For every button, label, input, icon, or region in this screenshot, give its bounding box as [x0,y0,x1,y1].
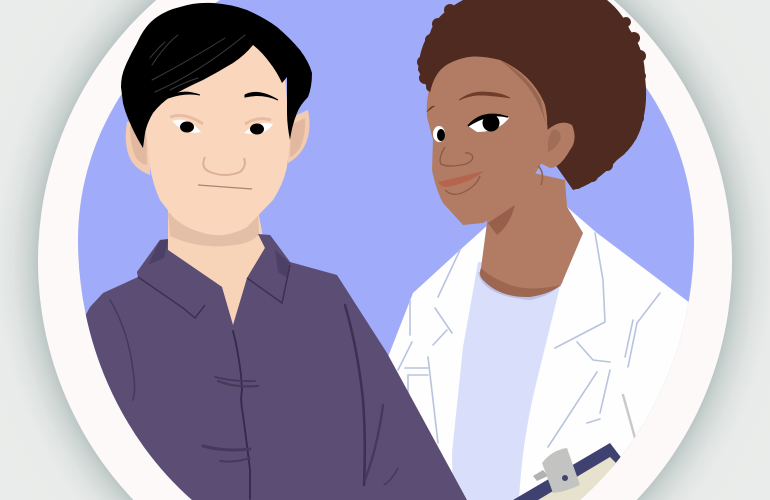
shirt folds [110,300,398,499]
clipboard [513,443,623,500]
patient neck [168,205,265,325]
doctor mouth [438,171,484,187]
patient mouth [198,185,252,189]
patient brows [168,92,278,100]
doctor face [427,56,548,225]
doctor left eye [433,126,445,142]
patient shirt [84,235,467,500]
doctor brows [427,92,510,112]
hair highlights [150,35,245,92]
patient left ear [126,120,150,175]
doctor right eye [468,114,509,132]
clip [542,448,580,493]
t-shirt hem shade [478,270,563,300]
patient right ear [288,110,310,163]
doctor hairline [429,56,548,125]
patient hair [121,3,312,148]
people group [84,0,690,500]
doctor nose [440,147,473,166]
doctor hair [417,0,646,190]
neck shadow [480,268,561,297]
doctor ear [538,123,575,168]
lab coat [360,207,690,500]
doctor neck [481,170,583,296]
chin shadow [488,205,515,235]
patient right eye [244,119,273,134]
patient nose [203,157,245,175]
neck shadow [168,210,259,246]
patient face [145,40,290,235]
patient left eye [170,116,203,133]
t-shirt [452,262,566,500]
patient [84,3,467,500]
doctor [360,0,690,500]
shirt collars [137,234,290,318]
blue oval backdrop [78,0,694,500]
doctor forehead shade [500,60,546,125]
coat fold lines [398,233,660,447]
white gap by sleeve [360,482,372,500]
